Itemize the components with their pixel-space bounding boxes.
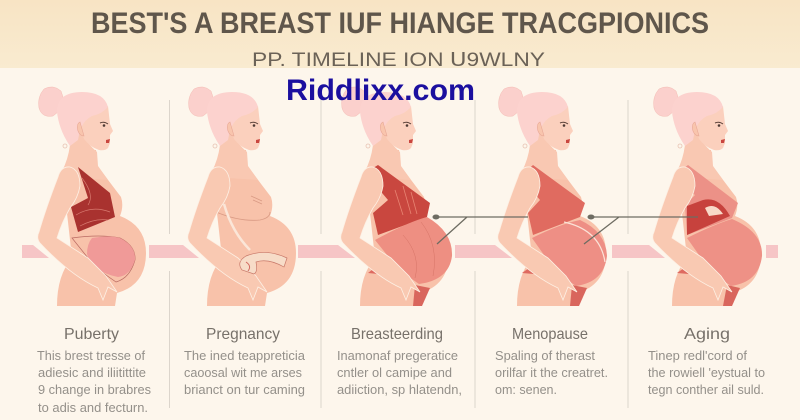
- figure: puberty: [38, 87, 146, 306]
- header band: [0, 0, 800, 68]
- text column: menopause: Spaling of therast: [495, 348, 595, 363]
- text column: aging: Aging: [684, 326, 730, 343]
- text column: menopause: orilfar it the creatret.: [495, 365, 608, 380]
- text column: pregnancy: The ined teappreticia: [184, 348, 306, 363]
- text column: menopause: [495, 326, 608, 397]
- text column: puberty: [37, 326, 151, 415]
- timeline band: [22, 245, 778, 258]
- text column: breastfeeding: Breasteerding: [351, 326, 443, 343]
- text column: puberty: adiesic and iliitittite: [38, 365, 146, 380]
- text column: breastfeeding: adiiction, sp hlatendn,: [337, 382, 462, 397]
- watermark: Riddlixx.com: [286, 74, 475, 107]
- text column: menopause: Menopause: [512, 326, 588, 343]
- figure: pregnancy: [188, 87, 296, 306]
- figure: menopause: [498, 87, 607, 306]
- text column: puberty: 9 change in brabres: [38, 382, 151, 397]
- callout: menopause to aging: [584, 214, 698, 244]
- text column: pregnancy: brianct on tur caming: [184, 382, 305, 397]
- callout: breastfeeding to menopause: [432, 214, 528, 244]
- text column: aging: the rowiell 'eystual to: [648, 365, 765, 380]
- text column: puberty: Puberty: [64, 326, 119, 343]
- text column: puberty: This brest tresse of: [37, 348, 145, 363]
- column dividers: [170, 100, 628, 408]
- subtitle: PP. TIMELINE ION ᑌ9WLNY: [252, 50, 545, 71]
- text column: breastfeeding: [337, 326, 462, 397]
- text column: puberty: to adis and fecturn.: [38, 400, 148, 415]
- title: BEST'S A BREAST IUF HIANGE TRACGPIONICS: [91, 7, 709, 40]
- text column: pregnancy: Pregnancy: [206, 326, 280, 343]
- text column: menopause: om: senen.: [495, 382, 557, 397]
- text column: breastfeeding: cntler ol camipe and: [337, 365, 452, 380]
- text column: aging: [648, 326, 765, 397]
- text column: aging: tegn conther ail suld.: [648, 382, 764, 397]
- text column: pregnancy: caoosal wit me arses: [184, 365, 302, 380]
- figure: aging: [653, 87, 762, 306]
- text column: aging: Tinep redl'cord of: [648, 348, 747, 363]
- figure: breastfeeding: [341, 87, 452, 306]
- text column: breastfeeding: Inamonaf pregeratice: [337, 348, 458, 363]
- text column: pregnancy: [184, 326, 306, 397]
